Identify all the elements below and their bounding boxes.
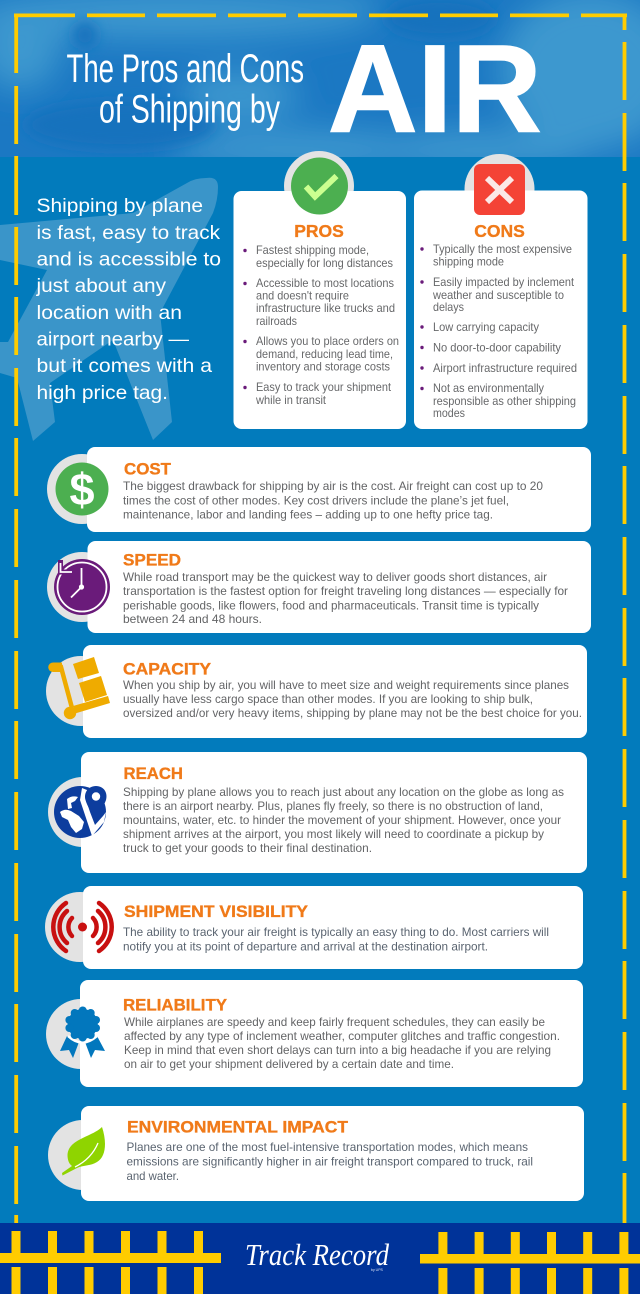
heading: capacity: CAPACITY	[123, 660, 212, 678]
intro text: just about any	[35, 275, 166, 297]
list: cons: Low carrying capacity	[433, 320, 539, 334]
intro text: airport nearby —	[36, 329, 190, 351]
text: speed: While road transport may be the quickest way to deliver goods short distances, air	[123, 570, 547, 584]
text: cost: The biggest drawback for shipping by air is the cost. Air freight can cost up to 20	[123, 479, 543, 493]
intro text: is fast, easy to track	[36, 222, 220, 244]
panel: speed	[47, 541, 591, 633]
text: cost: maintenance, labor and landing fees – adding up to one hefty price tag.	[123, 508, 493, 522]
list: pros: while in transit	[255, 393, 327, 407]
text: reliability: on air to get your shipment delivered by a certain date and time.	[124, 1057, 454, 1071]
logo: Track Record: by UPS	[371, 1268, 384, 1272]
list: cons: Not as environmentally	[433, 381, 544, 395]
text: shipment visibility: notify you at its point of departure and arrival at the destination airport.	[123, 940, 488, 954]
text: cost	[123, 479, 543, 522]
intro text: but it comes with a	[36, 355, 212, 377]
text: reliability: Keep in mind that even short delays can turn into a big headache if you are relying	[124, 1043, 551, 1057]
text: reliability: While airplanes are speedy and keep fairly frequent schedules, they can easily be	[124, 1015, 545, 1029]
list: cons: Airport infrastructure required	[433, 361, 577, 375]
text: environmental impact: Planes are one of the most fuel-intensive transportation modes, which means	[126, 1140, 528, 1154]
list: cons: delays	[433, 300, 464, 314]
list: cons: modes	[433, 406, 465, 420]
intro text: location with an	[36, 302, 182, 324]
list: pros: especially for long distances	[256, 256, 393, 270]
text: reliability: affected by any type of inclement weather, computer glitches and traffic congestion.	[124, 1029, 560, 1043]
icon: x mark	[474, 164, 525, 215]
panel: environmental impact	[48, 1106, 584, 1201]
icon: ribbon badge	[60, 1006, 105, 1058]
text: speed: transportation is the fastest option for freight traveling long distances — especially for	[123, 584, 568, 598]
railroad track: left	[0, 1231, 221, 1294]
panel: reliability	[46, 980, 583, 1087]
text: capacity: When you ship by air, you will have to meet size and weight requirements since planes	[123, 678, 569, 692]
icon: leaf	[62, 1127, 105, 1176]
icon: check mark	[291, 158, 348, 214]
heading: cost: COST	[124, 460, 172, 478]
icon: dollar: $	[69, 464, 95, 515]
list: cons: responsible as other shipping	[433, 394, 576, 408]
intro text	[35, 195, 221, 404]
list: pros: demand, reducing lead time,	[256, 347, 393, 361]
header sky background	[0, 0, 640, 170]
panel: pros	[234, 151, 406, 429]
text: reach: Shipping by plane allows you to reach just about any location on the globe as long as	[123, 785, 564, 799]
text: environmental impact: and water.	[126, 1169, 179, 1183]
list: pros: Accessible to most locations	[256, 276, 394, 290]
title: The Pros and Cons	[66, 47, 304, 91]
panel: capacity	[46, 645, 587, 738]
intro text: Shipping by plane	[36, 195, 203, 217]
list: pros: and doesn't require	[256, 288, 349, 302]
list: cons	[420, 242, 577, 420]
footer band	[0, 1223, 640, 1294]
title	[66, 21, 542, 159]
text: capacity: usually have less cargo space than other modes. If you are looking to ship bulk,	[123, 692, 533, 706]
text: speed	[123, 570, 568, 626]
list: cons: weather and susceptible to	[432, 288, 564, 302]
text: capacity	[123, 678, 582, 720]
text: reach: mountains, water, etc. to hinder the movement of your shipment. However, once your	[123, 813, 561, 827]
text: environmental impact: emissions are significantly higher in air freight transport compared to truck, rail	[126, 1154, 533, 1168]
text: shipment visibility	[123, 925, 549, 954]
heading: speed: SPEED	[123, 550, 181, 570]
heading: environmental impact: ENVIRONMENTAL IMPACT	[127, 1118, 349, 1136]
railroad track: right	[420, 1232, 640, 1294]
text: capacity: oversized and/or very heavy items, shipping by plane may not be the best choice for you.	[123, 706, 582, 720]
panel: cost	[47, 447, 591, 532]
text: reach: shipment arrives at the airport, you most likely will need to coordinate a pickup by	[123, 827, 544, 841]
list: cons: shipping mode	[433, 254, 504, 268]
list: cons: Easily impacted by inclement	[433, 275, 575, 289]
icon: plane silhouette	[0, 178, 218, 441]
title: of Shipping by	[99, 88, 280, 132]
text: speed: between 24 and 48 hours.	[123, 612, 262, 626]
text: shipment visibility: The ability to track your air freight is typically an easy thing to do. Most carriers will	[123, 925, 549, 939]
list: pros: Easy to track your shipment	[256, 380, 392, 394]
list: cons: No door-to-door capability	[433, 340, 561, 354]
heading: shipment visibility: SHIPMENT VISIBILITY	[124, 902, 309, 921]
text: reach: there is an airport nearby. Plus, planes fly freely, so there is no obstruction of land,	[123, 799, 543, 813]
text: speed: perishable goods, like flowers, food and pharmaceuticals. Transit time is typically	[123, 598, 539, 612]
panel: shipment visibility	[45, 886, 583, 969]
heading: reach: REACH	[124, 764, 183, 783]
text: reach: truck to get your goods to their final destination.	[123, 841, 372, 855]
text: cost: times the cost of other modes. Key cost drivers include the plane’s jet fuel,	[123, 493, 509, 507]
list: pros: Fastest shipping mode,	[256, 243, 369, 257]
list: pros: infrastructure like trucks and	[256, 301, 395, 315]
title: AIR	[328, 21, 542, 159]
list: pros: railroads	[256, 314, 297, 328]
heading: cons: CONS	[474, 221, 525, 241]
icon: globe and pin	[54, 786, 107, 838]
text: reach	[123, 785, 564, 855]
icon: signal	[53, 903, 112, 951]
intro text: high price tag.	[36, 382, 168, 404]
intro text: and is accessible to	[36, 249, 221, 271]
icon: hand truck	[48, 657, 110, 719]
list: pros: inventory and storage costs	[256, 360, 390, 374]
heading: pros: PROS	[294, 221, 344, 241]
icon: dollar	[56, 462, 108, 516]
icon: clock	[54, 559, 110, 615]
list: cons: Typically the most expensive	[433, 242, 572, 256]
heading: reliability: RELIABILITY	[123, 996, 228, 1014]
logo: Track Record: Track Record	[245, 1237, 389, 1272]
panel: reach	[48, 752, 587, 873]
list: pros: Allows you to place orders on	[256, 334, 399, 348]
list: pros	[243, 243, 399, 407]
text: environmental impact	[126, 1140, 533, 1183]
text: reliability	[124, 1015, 560, 1071]
panel: cons	[414, 154, 588, 429]
